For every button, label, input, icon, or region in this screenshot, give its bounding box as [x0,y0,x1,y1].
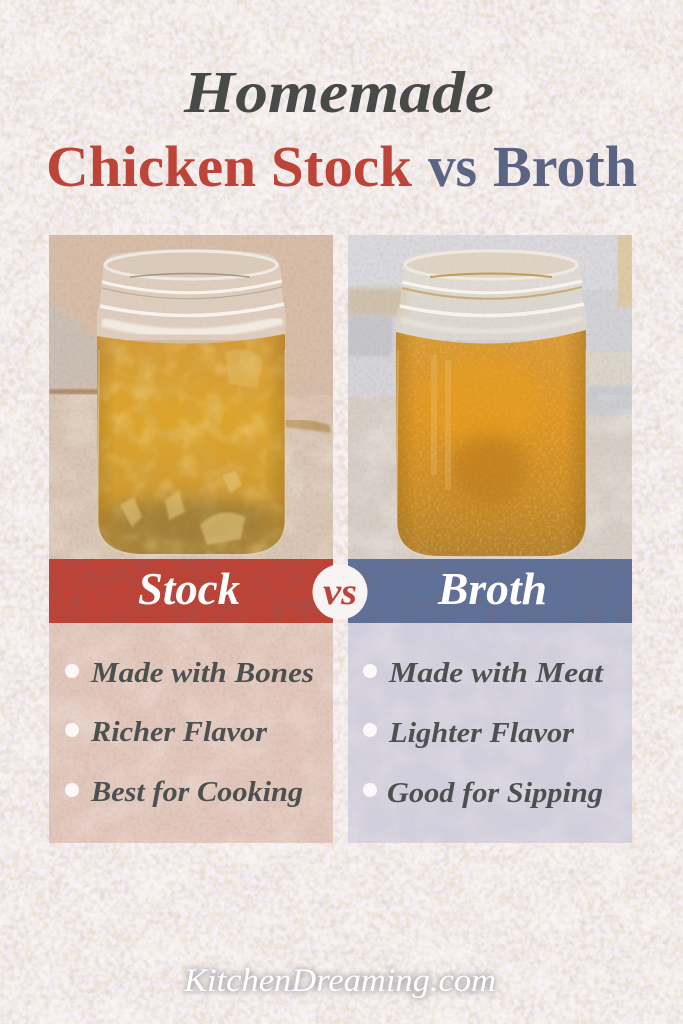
vs badge [312,564,368,620]
icon: stock jar [90,249,290,560]
list item: Made with Bones: Made with Bones [90,657,314,689]
icon: broth jar [390,249,590,560]
panel: broth list [348,623,632,843]
list item: Made with Meat: Made with Meat [388,657,604,689]
title line: Chicken Stock vs Broth [46,134,637,199]
footer: website name: KitchenDreaming.com [183,963,496,999]
panel: broth photo [348,235,632,560]
banner: Stock: Stock [138,564,240,614]
banner: Broth [348,559,632,623]
list item: Richer Flavor: Richer Flavor [90,716,268,748]
title [46,59,637,199]
glass neck [396,249,587,340]
banner: Stock [49,559,333,623]
title line: Chicken Stock vs Broth: Broth [493,134,637,199]
list item: Lighter Flavor: Lighter Flavor [388,717,575,749]
banner: Broth: Broth [437,564,547,614]
panel: stock photo [49,235,333,560]
broth liquid [390,325,590,560]
title line: Chicken Stock vs Broth: vs [428,134,477,199]
panel: stock list [49,623,333,843]
photo background: towels and counter [348,235,632,559]
list item: Good for Sipping: Good for Sipping [387,777,603,809]
title line: Homemade: Homemade [183,59,494,125]
stock liquid with gelatin [97,334,285,554]
photo background: cloth and counter [49,235,333,559]
list item: Best for Cooking: Best for Cooking [90,776,303,808]
vs badge: vs [323,571,357,613]
title line: Chicken Stock vs Broth: Chicken Stock [46,134,413,199]
footer: website name: KitchenDreaming.com [183,963,496,999]
glass neck [97,249,286,340]
